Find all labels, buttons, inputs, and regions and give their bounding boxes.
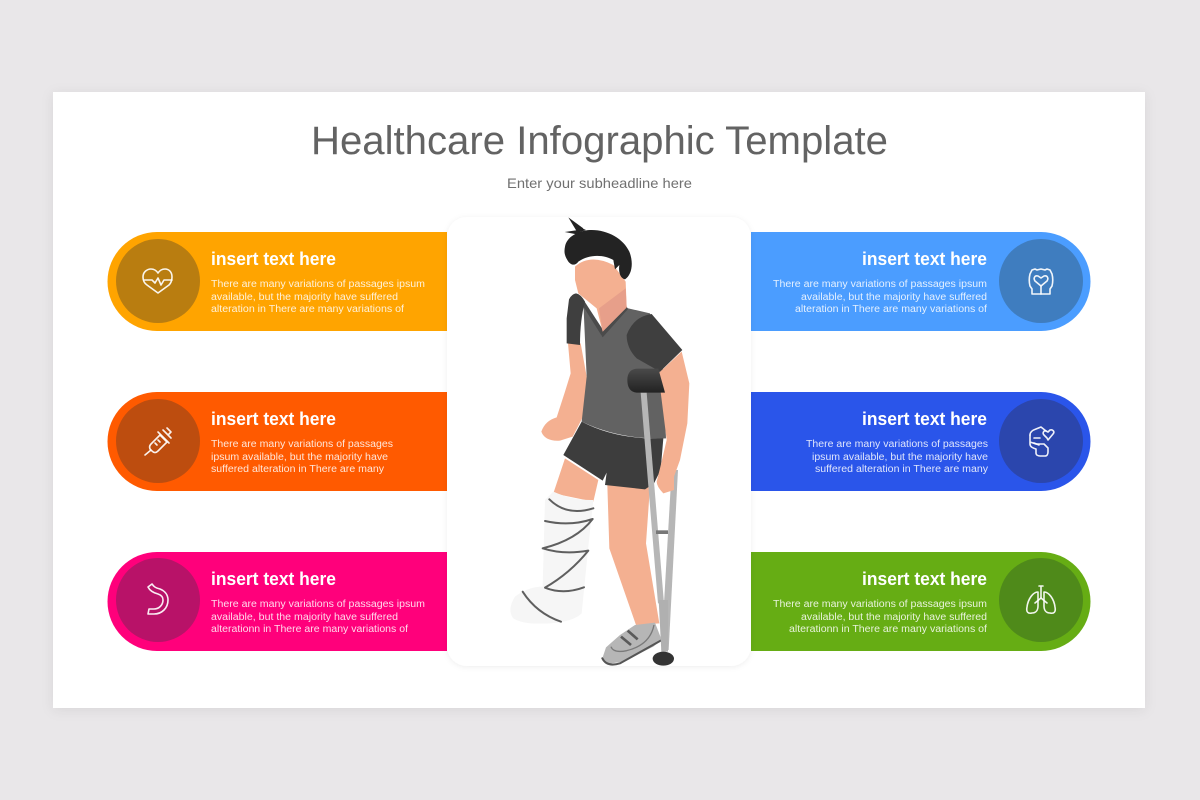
body text: There are many variations of passages ipsum xyxy=(773,599,987,610)
body text xyxy=(773,599,987,635)
crutch xyxy=(627,369,674,666)
body text: There are many variations of passages xyxy=(211,439,393,450)
icon: stomach xyxy=(148,584,168,614)
body text: alterationn in There are many variations of xyxy=(211,624,408,635)
casted leg thigh xyxy=(553,458,598,502)
cast bandage lines xyxy=(523,499,593,622)
title: Healthcare Infographic Template xyxy=(311,119,888,163)
icon: hands holding heart xyxy=(1029,269,1053,294)
heading: insert text here xyxy=(211,569,336,589)
subtitle: Enter your subheadline here xyxy=(507,175,692,191)
leg cast xyxy=(510,492,593,624)
heading: insert text here xyxy=(211,249,336,269)
illustration: injured man on crutch xyxy=(510,217,689,666)
shorts xyxy=(563,422,663,489)
body text: suffered alteration in There are many xyxy=(211,464,384,475)
heading: insert text here xyxy=(862,569,987,589)
body text: alteration in There are many variations of xyxy=(211,304,404,315)
right sleeve xyxy=(627,314,682,372)
body text: available, but the majority have suffered xyxy=(801,292,987,303)
body text: There are many variations of passages ipsum xyxy=(211,279,425,290)
icon: organ with heart xyxy=(1030,427,1054,456)
body text xyxy=(211,599,425,635)
panel: orange top left xyxy=(108,232,447,331)
left sleeve xyxy=(567,293,585,345)
heading: insert text here xyxy=(862,249,987,269)
body text: suffered alteration in There are many xyxy=(815,464,988,475)
neck shadow xyxy=(599,288,627,332)
body text: alteration in There are many variations of xyxy=(795,304,987,315)
right arm xyxy=(657,352,689,493)
heading: insert text here xyxy=(211,409,336,429)
hair xyxy=(564,217,632,279)
body text: ipsum available, but the majority have xyxy=(211,452,388,463)
outer crutch pole xyxy=(661,470,678,650)
icon: syringe xyxy=(145,428,171,455)
body text: available, but the majority have suffered xyxy=(211,292,398,303)
body text: There are many variations of passages ipsum xyxy=(211,599,425,610)
icon: heart with pulse xyxy=(143,269,172,293)
panel: red-orange middle left xyxy=(108,392,447,491)
left arm xyxy=(541,343,587,441)
center white card xyxy=(447,217,751,666)
body text: There are many variations of passages ipsum xyxy=(773,279,987,290)
icon: lungs xyxy=(1027,586,1055,613)
body text: alterationn in There are many variations of xyxy=(789,624,987,635)
body text xyxy=(806,439,988,475)
panel: royal blue middle right xyxy=(751,392,1090,491)
body text xyxy=(773,279,987,315)
head and neck xyxy=(575,260,627,332)
body text xyxy=(211,279,425,315)
standing leg xyxy=(607,485,659,625)
heading: insert text here xyxy=(862,409,987,429)
shoe xyxy=(602,623,662,665)
body text: ipsum available, but the majority have xyxy=(812,452,988,463)
panel: light blue top right xyxy=(751,232,1090,331)
collar xyxy=(582,301,628,337)
body text: There are many variations of passages xyxy=(806,439,988,450)
shirt xyxy=(582,303,666,438)
body text: available, but the majority have suffered xyxy=(211,612,398,623)
body text: available, but the majority have suffered xyxy=(801,612,987,623)
white slide panel xyxy=(53,92,1145,708)
body text xyxy=(211,439,393,475)
panel: pink bottom left xyxy=(108,552,447,651)
panel: green bottom right xyxy=(751,552,1090,651)
